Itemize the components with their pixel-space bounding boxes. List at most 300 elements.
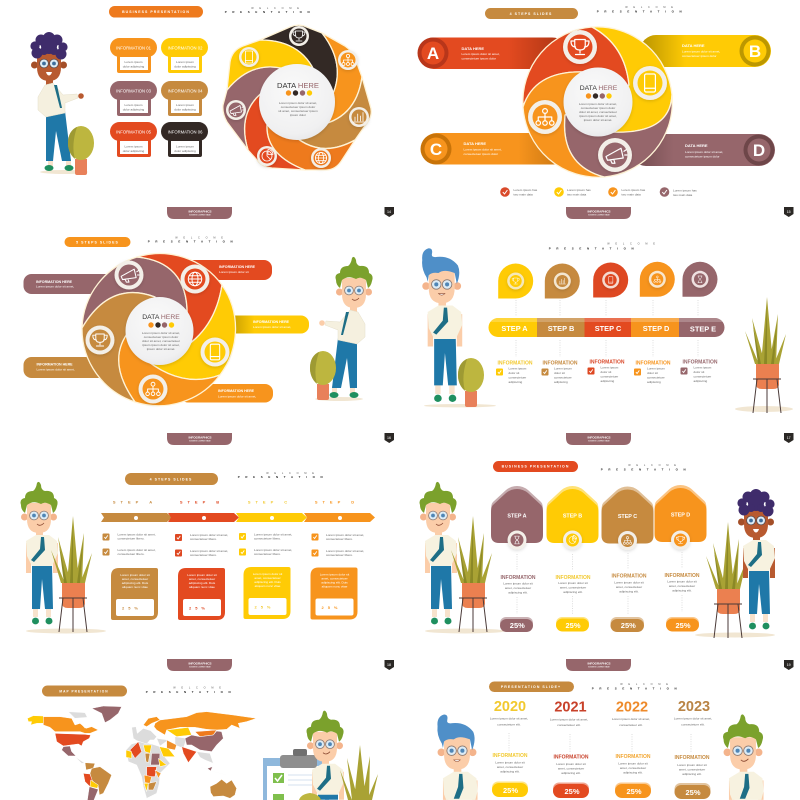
stat cards: 25%	[321, 605, 342, 610]
year descriptions: consectetuer elit.	[497, 722, 521, 726]
info cards grid: dolor adipiscing	[174, 149, 196, 153]
information blocks: amet, consectetuer	[679, 768, 705, 772]
welcome presentation title: WELCOME	[607, 242, 661, 246]
cactus behind hands	[299, 793, 321, 800]
information blocks: adipiscing elit.	[672, 588, 692, 592]
info cards grid	[110, 38, 208, 157]
label bar D: DATA HERE	[685, 143, 708, 148]
step house cards: STEP C	[618, 514, 637, 520]
step details	[496, 360, 718, 384]
check lists: Lorem ipsum dolor sit amet,	[254, 548, 292, 552]
step details: adipiscing	[694, 379, 708, 383]
label bar D: consectetuer ipsum dolor	[685, 154, 720, 158]
footer tab	[566, 433, 631, 445]
panel: slide 15 four step wheel	[418, 6, 794, 219]
label bar B	[640, 35, 771, 67]
step details: dolor sit	[647, 371, 658, 375]
page number badge	[384, 660, 394, 670]
year descriptions	[490, 716, 712, 727]
label bars: INFORMATION HERE	[219, 265, 256, 269]
page number badge: 16	[387, 436, 391, 440]
plant on stand left	[425, 516, 505, 634]
step bar: STEP C	[595, 324, 622, 333]
check lists: consectetuer libero.	[326, 553, 353, 557]
step details: consectetuer	[694, 374, 711, 378]
step details: adipiscing	[554, 380, 568, 384]
info cards grid: dolor adipiscing	[174, 64, 196, 68]
stat cards: 25%	[254, 604, 275, 610]
information blocks: adipiscing elit.	[619, 590, 639, 594]
info cards grid: Lorem ipsum	[125, 144, 143, 148]
information blocks: Lorem ipsum dolor sit	[677, 763, 707, 767]
heading pill	[493, 461, 578, 472]
plant	[340, 745, 378, 800]
information blocks: amet, consectetuer	[620, 766, 646, 770]
character: green haired man	[420, 482, 457, 624]
heading pill: BUSINESS PRESENTATION	[122, 10, 190, 14]
year descriptions: Lorem ipsum dolor sit amet,	[674, 716, 712, 720]
step details: dolor sit	[694, 370, 704, 374]
character: green haired man	[723, 714, 764, 800]
percent pills: 25%	[565, 621, 581, 630]
stat cards: 25%	[122, 606, 142, 610]
legend checks	[500, 187, 697, 197]
heading pill	[42, 686, 127, 696]
welcome presentation title: WELCOME	[628, 464, 682, 467]
info cards grid: Lorem ipsum	[176, 144, 194, 148]
stat cards: 25%	[189, 606, 209, 610]
step details: adipiscing	[508, 380, 523, 384]
center disc: data here: dolor sit amet, consectetuer	[579, 110, 617, 114]
step details: INFORMATION	[498, 360, 533, 366]
panel: slide 20 world map	[27, 686, 378, 800]
check lists	[102, 532, 364, 557]
step details: dolor sit	[600, 370, 611, 374]
footer tab	[566, 207, 631, 219]
welcome presentation title: PRESENTATION	[601, 468, 691, 472]
five blade wheel	[82, 254, 236, 406]
step house cards	[491, 485, 706, 550]
center disc: data here: Lorem ipsum dolor sit amet,	[142, 331, 180, 335]
info cards grid: INFORMATION 03	[116, 88, 152, 94]
check lists: consectetuer libero.	[118, 536, 145, 540]
percent pills	[500, 617, 699, 632]
label bar D: D	[753, 141, 765, 160]
welcome presentation title	[148, 236, 238, 244]
label bars: Lorem ipsum dolor sit amet,	[253, 325, 291, 329]
welcome presentation title	[597, 6, 687, 13]
stat cards: aliquam nunc vitae	[255, 584, 281, 588]
label bars: Lorem ipsum dolor sit amet,	[218, 394, 256, 398]
check lists: consectetuer libero.	[254, 536, 281, 540]
step bar: STEP D	[643, 324, 670, 333]
legend checks: two main data	[673, 193, 693, 197]
percent pills: 25%	[503, 786, 518, 795]
footer tab: INFOGRAPHICS	[587, 662, 611, 666]
stat cards: Lorem ipsum dolor sit	[253, 572, 282, 576]
check lists: consectetuer libero.	[190, 537, 217, 541]
welcome presentation title: WELCOME	[173, 686, 227, 690]
legend checks: Lorem ipsum has	[673, 188, 697, 192]
page number badge: 15	[787, 210, 791, 214]
information blocks: adipiscing elit.	[508, 590, 528, 594]
label bar C	[420, 133, 571, 164]
step bar: STEP E	[690, 324, 716, 334]
label bar A: DATA HERE	[462, 46, 484, 51]
label bar D	[630, 134, 775, 166]
footer tab: BUSINESS COMPANY NAME	[189, 666, 211, 668]
footer tab: BUSINESS COMPANY NAME	[189, 214, 211, 216]
label bars: Lorem ipsum dolor sit amet,	[36, 368, 75, 372]
center disc: data here: DATA HERE	[142, 314, 180, 321]
heading pill	[64, 237, 130, 247]
step details: consectetuer	[600, 374, 618, 378]
stat cards: adipiscing elit. Duis	[122, 581, 149, 585]
page number badge: 19	[787, 663, 791, 667]
panel: slide 19 four house cards	[420, 461, 794, 671]
heading pill: 4 STEPS SLIDES	[510, 12, 552, 16]
footer tab: BUSINESS COMPANY NAME	[189, 440, 211, 442]
step details: Lorem ipsum	[554, 366, 572, 370]
footer tab: BUSINESS COMPANY NAME	[588, 440, 610, 442]
information blocks: adipiscing elit.	[563, 590, 583, 594]
info cards grid: dolor adipiscing	[123, 149, 145, 153]
year descriptions: consectetuer elit.	[681, 722, 705, 726]
label bar A: A	[427, 44, 439, 63]
step bar: STEP A	[501, 324, 528, 333]
check lists: Lorem ipsum dolor sit amet,	[326, 549, 364, 553]
legend checks: Lorem ipsum has	[514, 188, 538, 192]
check lists: Lorem ipsum dolor sit amet,	[254, 532, 292, 536]
welcome presentation title: PRESENTATION	[225, 10, 315, 14]
clipboard	[263, 749, 329, 800]
check lists: Lorem ipsum dolor sit amet,	[190, 549, 228, 553]
character: green haired man	[306, 711, 344, 800]
information blocks: adipiscing elit.	[500, 770, 520, 774]
percent pills: 25%	[510, 621, 525, 630]
center disc: data here: ipsum ipsum dolor sit amet,	[142, 343, 180, 347]
footer tab: BUSINESS COMPANY NAME	[588, 214, 610, 216]
icon: cactus	[68, 126, 94, 175]
check lists: consectetuer libero.	[326, 537, 353, 541]
year descriptions: Lorem ipsum dolor sit amet,	[612, 717, 650, 721]
heading pill: MAP PRESENTATION	[59, 690, 109, 694]
information blocks: Lorem ipsum dolor sit	[556, 762, 586, 766]
label bar B: DATA HERE	[682, 43, 705, 48]
center disc: data here: ipsum dolor sit amet.	[584, 118, 612, 122]
information blocks: INFORMATION	[675, 755, 710, 761]
step labels: STEP B	[180, 500, 224, 504]
check lists: Lorem ipsum dolor sit amet,	[326, 533, 364, 537]
step house cards: STEP D	[671, 512, 690, 518]
center disc: data here	[259, 64, 335, 140]
legend checks: two main data	[567, 192, 587, 196]
stat cards: aliquam nunc vitae	[322, 584, 348, 588]
info cards grid: dolor adipiscing	[123, 64, 145, 68]
information blocks: Lorem ipsum dolor sit	[667, 580, 697, 584]
information blocks: INFORMATION	[554, 754, 589, 760]
step details: consectetuer	[508, 376, 526, 380]
welcome presentation title: WELCOME	[266, 472, 320, 475]
label bar A: consectetuer ipsum dolor	[462, 56, 496, 60]
label bars: Lorem ipsum dolor sit	[219, 270, 249, 274]
plant on stand	[735, 297, 793, 413]
center disc: data here: consectetuer ipsum dolor	[144, 335, 178, 339]
label bar B: consectetuer ipsum dolor	[682, 54, 717, 58]
label bar C: Lorem ipsum dolor sit amet,	[464, 148, 502, 152]
step details: Lorem ipsum	[694, 366, 712, 370]
welcome presentation title: PRESENTATION	[549, 246, 639, 250]
center disc: data here: sit amet, consectetuer ipsum	[278, 109, 318, 113]
heading pill	[485, 8, 578, 19]
center disc: data here: consectetuer ipsum dolor	[281, 105, 315, 109]
information blocks	[493, 753, 710, 776]
percent pills: 25%	[675, 621, 691, 630]
label bars: INFORMATION HERE	[36, 362, 73, 366]
percent pills: 25%	[626, 787, 642, 796]
label bar A: Lorem ipsum dolor sit amet,	[462, 52, 500, 56]
legend checks: Lorem ipsum has	[622, 188, 646, 192]
character: blue haired man	[422, 248, 462, 402]
information blocks: Lorem ipsum dolor sit	[495, 760, 525, 764]
step details: consectetuer	[647, 376, 665, 380]
percent pills: 25%	[685, 788, 701, 797]
step bar	[489, 318, 724, 337]
character: curly haired man	[737, 489, 775, 629]
label bar B: Lorem ipsum dolor sit amet,	[682, 50, 720, 54]
information blocks: INFORMATION	[493, 753, 528, 759]
information blocks: INFORMATION	[616, 754, 651, 760]
character: curly haired presenter	[30, 32, 88, 174]
step labels: STEP D	[315, 500, 359, 504]
stat cards: amet, consectetuer	[254, 576, 281, 580]
center disc: data here: ipsum dolor sit amet.	[147, 347, 175, 351]
character: green haired presenter	[315, 257, 373, 401]
welcome presentation title: PRESENTATION	[146, 690, 236, 694]
step details: dolor sit	[508, 371, 519, 375]
panel: slide 17 five step timeline	[422, 242, 794, 445]
label bar C: C	[430, 140, 442, 159]
info cards grid: Lorem ipsum	[125, 103, 143, 107]
label bar D: Lorem ipsum dolor sit amet,	[685, 150, 723, 154]
check lists: Lorem ipsum dolor sit amet,	[118, 532, 156, 536]
step labels	[113, 500, 359, 504]
stat cards: adipiscing elit. Duis	[254, 580, 281, 584]
step details: INFORMATION	[636, 360, 671, 366]
welcome presentation title	[601, 464, 691, 472]
stat cards: Lorem ipsum dolor sit	[120, 573, 150, 577]
legend checks: two main data	[514, 192, 533, 196]
year descriptions: Lorem ipsum dolor sit amet,	[490, 716, 528, 720]
character: blue haired man	[437, 715, 478, 800]
heading pill: PRESENTATION SLIDE+	[501, 685, 561, 689]
info cards grid: dolor adipiscing	[123, 108, 145, 112]
page number badge	[784, 433, 794, 443]
information blocks: amet, consectetuer	[497, 765, 523, 769]
information blocks: Lorem ipsum dolor sit	[614, 580, 644, 584]
footer tab	[167, 207, 232, 219]
wheel icon badges	[528, 30, 667, 172]
welcome presentation title: WELCOME	[625, 6, 679, 9]
center disc: data here: Lorem ipsum dolor sit amet,	[579, 102, 617, 106]
heading pill: BUSINESS PRESENTATION	[502, 465, 569, 469]
step details: INFORMATION	[543, 360, 578, 366]
chevron arrows	[101, 513, 375, 522]
stat cards: aliquam nunc vitae	[189, 585, 215, 589]
ground shadow and cactus	[424, 358, 496, 407]
stat cards: adipiscing elit. Duis	[321, 580, 348, 584]
step details: consectetuer	[554, 376, 572, 380]
info cards grid: dolor adipiscing	[174, 108, 196, 112]
panel: slide 16 five step wheel	[24, 236, 394, 445]
check lists: Lorem ipsum dolor sit amet,	[190, 533, 228, 537]
step details: Lorem ipsum	[647, 366, 665, 370]
welcome presentation title	[238, 472, 328, 479]
center disc: data here: Lorem ipsum dolor sit amet,	[279, 101, 317, 105]
legend checks: Lorem ipsum has	[567, 188, 591, 192]
page number badge: 14	[387, 210, 391, 214]
center disc: data here: consectetuer ipsum dolor	[581, 106, 615, 110]
info cards grid: Lorem ipsum	[176, 60, 194, 64]
check lists: consectetuer libero.	[190, 553, 217, 557]
information blocks: INFORMATION	[665, 573, 700, 579]
stat cards: adipiscing elit. Duis	[189, 581, 216, 585]
step house cards: STEP B	[563, 514, 582, 520]
step house cards: STEP A	[507, 514, 527, 520]
panel: slide 18 four step arrows	[20, 472, 394, 671]
label bars: INFORMATION HERE	[36, 280, 73, 284]
step details: dolor sit	[554, 371, 565, 375]
info cards grid: INFORMATION 01	[116, 46, 152, 50]
info cards grid: Lorem ipsum	[125, 60, 143, 64]
information blocks: INFORMATION	[612, 574, 647, 580]
information blocks: amet, consectetuer	[669, 584, 695, 588]
stat cards: amet, consectetuer	[321, 576, 348, 580]
footer tab: INFOGRAPHICS	[587, 436, 611, 440]
welcome presentation title: WELCOME	[251, 7, 305, 10]
label bars	[24, 260, 309, 402]
welcome presentation title	[146, 686, 236, 694]
page number badge: 18	[387, 663, 391, 667]
step details: adipiscing	[647, 380, 661, 384]
year descriptions: Lorem ipsum dolor sit amet,	[550, 718, 588, 722]
heading pill	[109, 6, 203, 18]
information blocks: Lorem ipsum dolor sit	[558, 581, 588, 585]
footer tab: INFOGRAPHICS	[587, 210, 611, 214]
label bar B: B	[749, 42, 761, 61]
step details: INFORMATION	[683, 360, 718, 366]
page number badge	[784, 660, 794, 670]
step details: adipiscing	[600, 379, 615, 383]
welcome presentation title	[225, 7, 315, 14]
info cards grid: INFORMATION 02	[168, 46, 203, 50]
step details: Lorem ipsum	[600, 366, 619, 370]
stat cards: Lorem ipsum dolor sit	[187, 573, 217, 577]
label bar C: consectetuer ipsum dolor	[464, 152, 498, 156]
years: 2021	[554, 700, 587, 716]
welcome presentation title	[592, 683, 682, 690]
stat cards: aliquam nunc vitae	[122, 585, 148, 589]
information blocks: INFORMATION	[556, 575, 591, 581]
step pins	[498, 262, 718, 298]
plant on stand right	[695, 522, 775, 638]
footer tab: INFOGRAPHICS	[188, 662, 212, 666]
years	[494, 699, 710, 716]
info cards grid: Lorem ipsum	[176, 103, 194, 107]
check lists: consectetuer libero.	[118, 552, 145, 556]
information blocks	[501, 573, 700, 594]
percent pills: 25%	[564, 787, 580, 796]
heading pill	[489, 682, 574, 692]
information blocks: adipiscing elit.	[682, 772, 702, 776]
welcome presentation title: WELCOME	[620, 683, 674, 686]
year descriptions: consectetuer elit.	[557, 723, 581, 727]
label bar C: DATA HERE	[464, 141, 486, 146]
legend checks: two main data	[622, 192, 641, 196]
center disc: data here: ipsum ipsum dolor sit amet,	[579, 114, 617, 118]
page number badge	[384, 207, 394, 217]
footer tab	[167, 433, 232, 445]
seven blade wheel	[223, 25, 371, 170]
welcome presentation title: PRESENTATION	[592, 686, 682, 690]
stat cards: amet, consectetuer	[189, 577, 215, 581]
heading pill: 4 STEPS SLIDES	[150, 478, 192, 482]
center disc: data here	[126, 297, 194, 365]
years: 2023	[678, 699, 710, 715]
welcome presentation title: PRESENTATION	[238, 475, 328, 479]
information blocks: amet, consectetuer	[560, 586, 586, 590]
step bar: STEP B	[548, 324, 574, 333]
center disc: data here: DATA HERE	[277, 81, 319, 90]
check lists: Lorem ipsum dolor sit amet,	[118, 548, 156, 552]
years: 2020	[494, 699, 526, 715]
label bars: Lorem ipsum dolor sit amet,	[36, 284, 74, 288]
page number badge	[384, 433, 394, 443]
step labels: STEP A	[113, 500, 157, 504]
information blocks: Lorem ipsum dolor sit	[618, 762, 648, 766]
information blocks: amet, consectetuer	[616, 585, 642, 589]
center disc: data here: dolor sit amet, consectetuer	[142, 339, 180, 343]
label bar A	[418, 38, 568, 69]
information blocks: Lorem ipsum dolor sit	[503, 582, 533, 586]
stat cards: amet, consectetuer	[122, 577, 148, 581]
welcome presentation title: PRESENTATION	[597, 9, 687, 13]
label bars: INFORMATION HERE	[253, 320, 290, 324]
plant on stand	[26, 516, 106, 634]
information blocks: INFORMATION	[501, 575, 536, 581]
panel: slide 21 yearly timeline	[437, 682, 764, 800]
panel: slide 14 seven-part wheel	[30, 6, 394, 219]
center disc: data here	[564, 68, 632, 136]
label bars: INFORMATION HERE	[218, 389, 255, 393]
step labels: STEP C	[248, 500, 292, 504]
wheel icon badges	[86, 260, 230, 404]
heading pill	[125, 473, 218, 485]
information blocks: amet, consectetuer	[558, 766, 584, 770]
percent pills: 25%	[621, 621, 636, 630]
footer tab: INFOGRAPHICS	[188, 210, 212, 214]
character: green haired man	[20, 482, 58, 624]
stat cards: Lorem ipsum dolor sit	[320, 572, 349, 576]
information blocks: adipiscing elit.	[561, 771, 581, 775]
footer tab: BUSINESS COMPANY NAME	[588, 666, 610, 668]
center disc: data here: ipsum dolor	[290, 113, 306, 117]
welcome presentation title: WELCOME	[175, 236, 229, 240]
step details: INFORMATION	[590, 360, 625, 366]
footer tab: INFOGRAPHICS	[188, 436, 212, 440]
footer tab	[566, 659, 631, 671]
step details: Lorem ipsum	[508, 366, 527, 370]
